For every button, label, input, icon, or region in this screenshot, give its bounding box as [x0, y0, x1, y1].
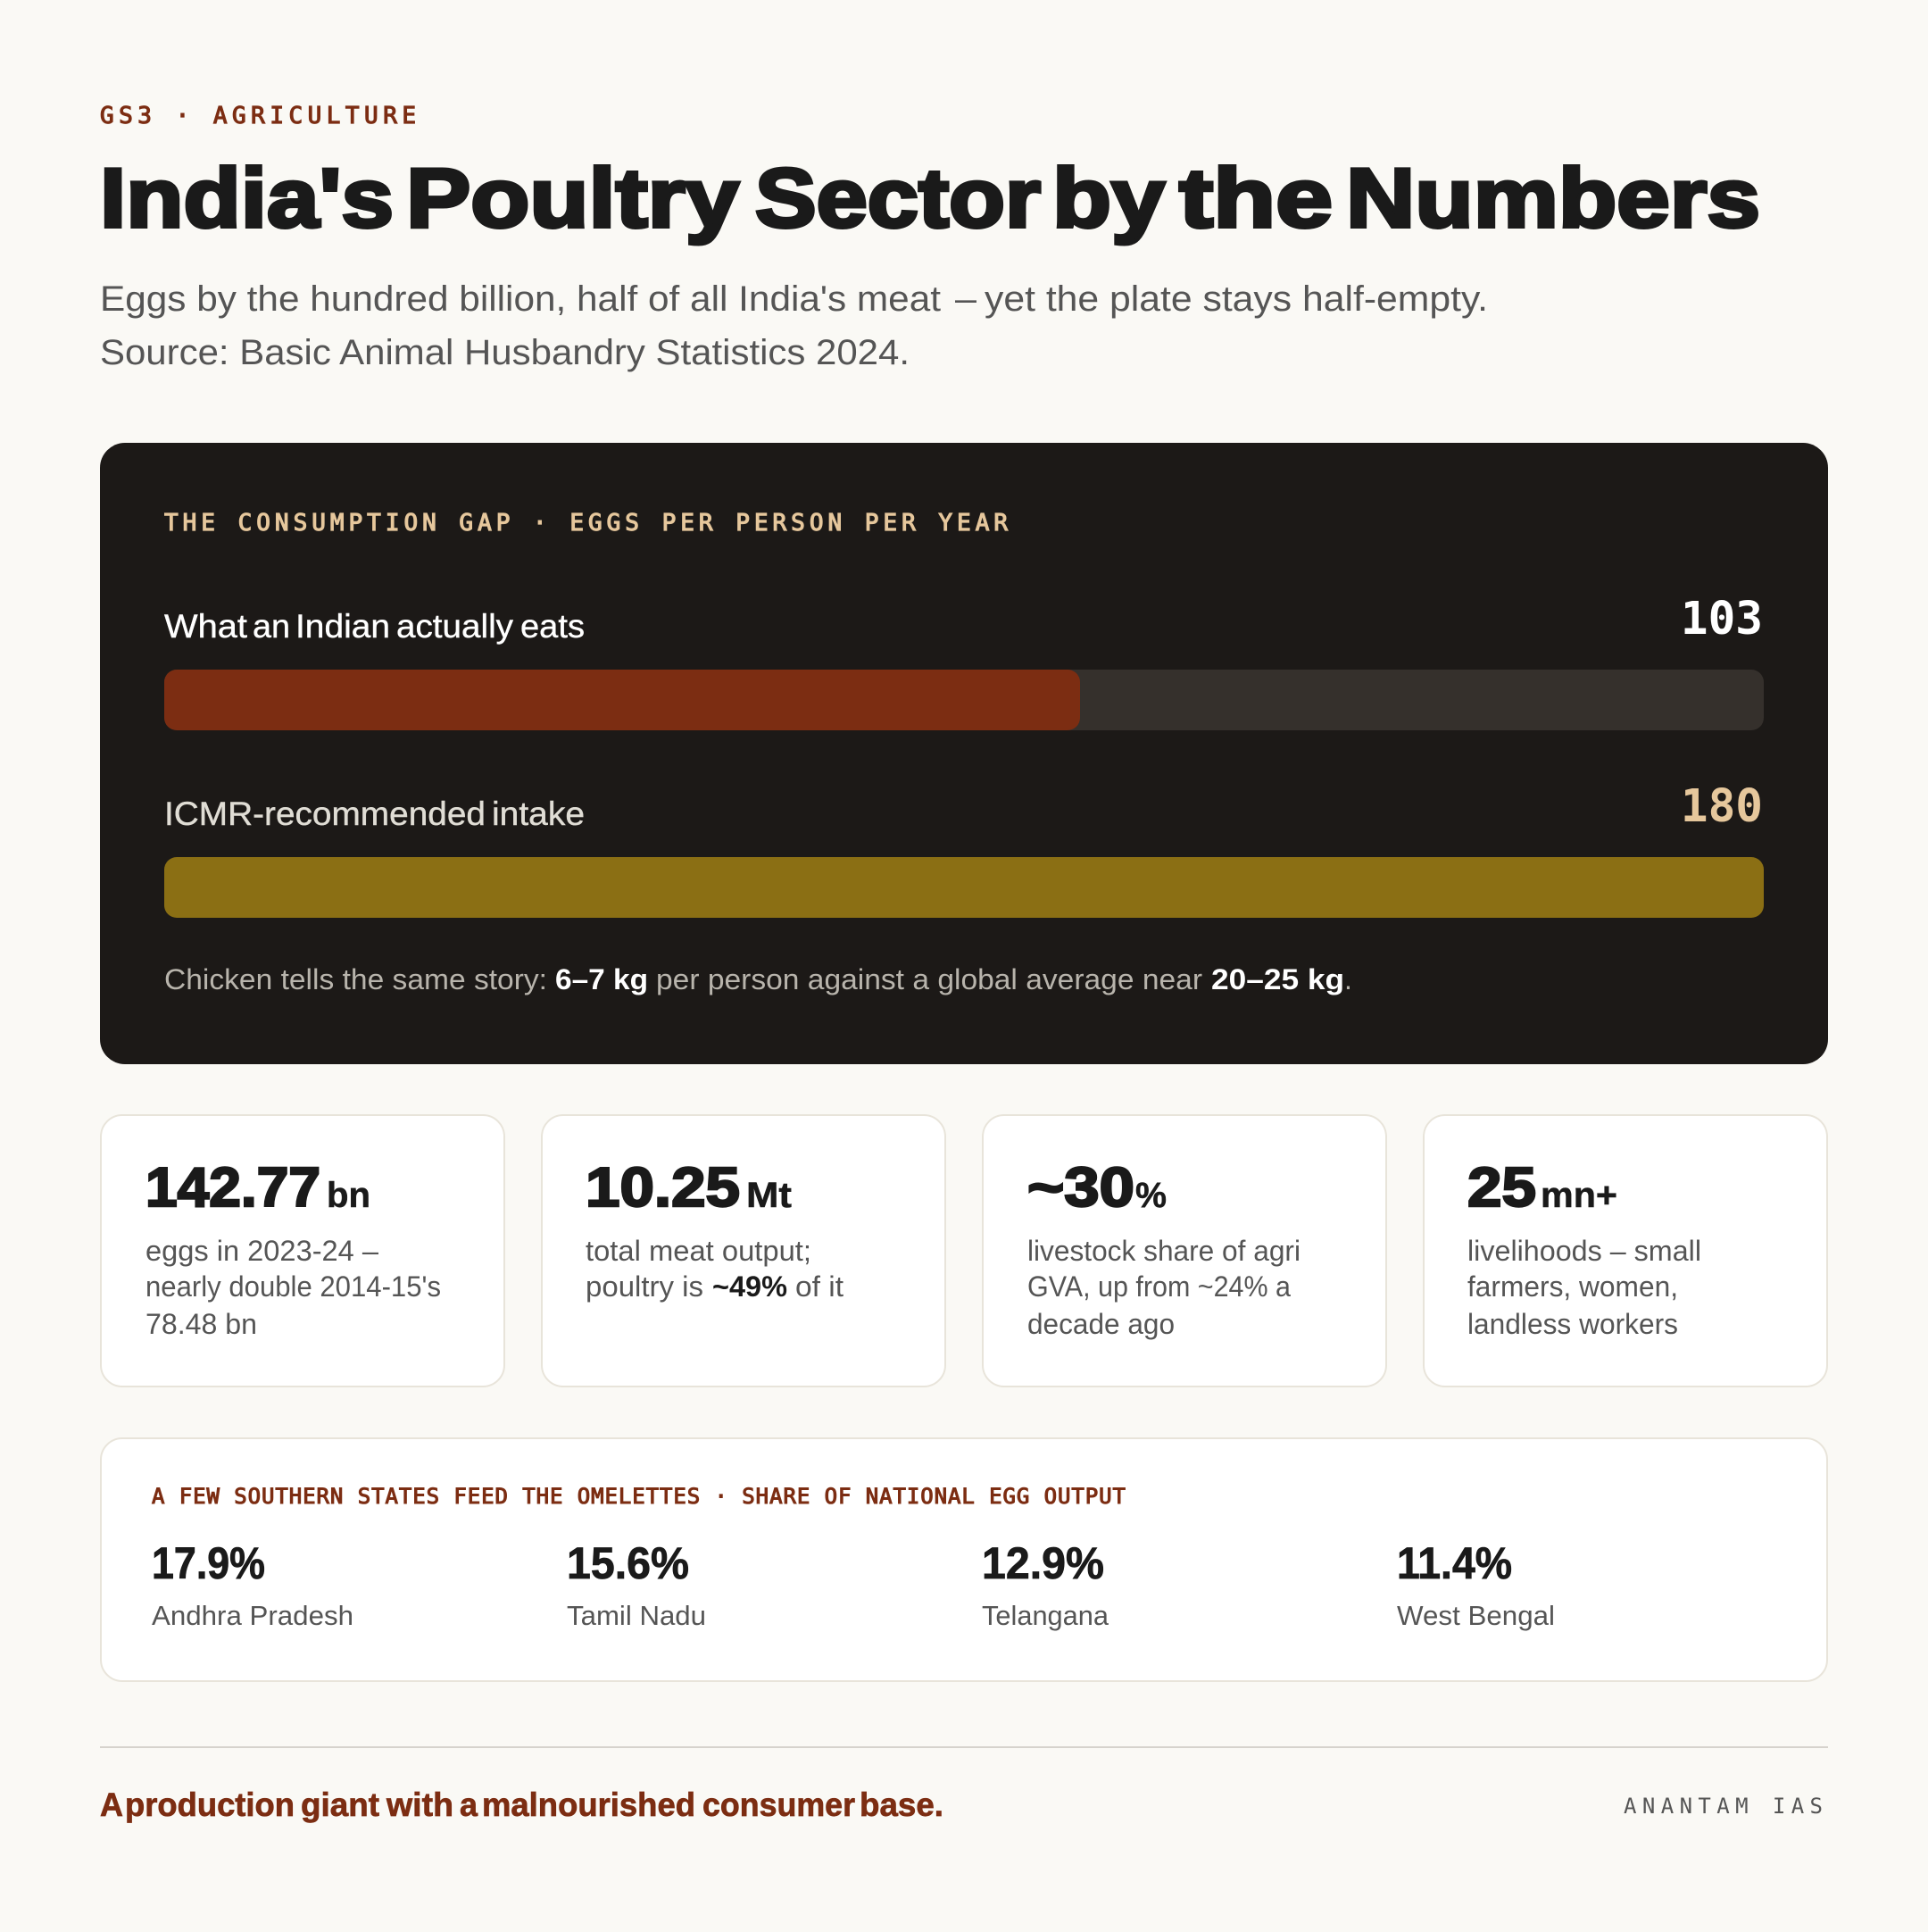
row: actual intake: What: [164, 608, 248, 645]
state: West Bengal: [1397, 1538, 1555, 1631]
row: actual intake: an: [253, 608, 290, 645]
state: Tamil Nadu: [567, 1538, 706, 1631]
stat card: meat: of it: [795, 1270, 844, 1303]
stat card: eggs: eggs in 2023-24 –: [145, 1235, 378, 1267]
stat card: livestock share: [983, 1115, 1386, 1387]
header: [100, 103, 1760, 372]
row: actual intake: eats: [520, 608, 585, 645]
panel: state shares: [101, 1438, 1827, 1681]
stat card: livestock share: GVA, up from ~24% a: [1027, 1270, 1291, 1303]
caption: Chicken tells the same story:: [164, 963, 547, 995]
title: by: [1052, 151, 1165, 245]
stat card: meat: ~49%: [712, 1270, 787, 1303]
stat card: meat: 10.25: [586, 1157, 740, 1219]
state: West Bengal: 11.4%: [1397, 1538, 1512, 1588]
title: Poultry: [406, 151, 739, 245]
state: Telangana: Telangana: [982, 1600, 1109, 1631]
takeaway: a: [460, 1786, 478, 1823]
state: Andhra Pradesh: Andhra Pradesh: [152, 1600, 353, 1631]
row: actual intake: Indian: [295, 608, 390, 645]
panel: consumption gap: [100, 443, 1828, 1064]
takeaway: [100, 1786, 943, 1823]
stat card: meat: total meat output;: [586, 1235, 811, 1267]
takeaway: base.: [860, 1786, 943, 1823]
title: Sector: [755, 151, 1041, 245]
takeaway: with: [386, 1786, 453, 1823]
row: recommended intake: intake: [492, 795, 585, 832]
takeaway: giant: [301, 1786, 379, 1823]
stat card: livelihoods: livelihoods – small: [1467, 1235, 1701, 1267]
stat card: meat: [542, 1115, 945, 1387]
state: Telangana: 12.9%: [982, 1538, 1104, 1588]
section label: A FEW SOUTHERN STATES FEED THE OMELETTES · SHARE OF NATIONAL EGG OUTPUT: [152, 1484, 1126, 1509]
footer: [100, 1786, 1823, 1823]
stat card: livelihoods: 25: [1467, 1157, 1536, 1219]
row: recommended intake: ICMR-recommended: [164, 795, 486, 832]
row: recommended intake: [164, 780, 1764, 918]
title: [100, 151, 1760, 245]
state: West Bengal: West Bengal: [1397, 1600, 1555, 1631]
section label: THE CONSUMPTION GAP · EGGS PER PERSON PER YEAR: [164, 510, 1008, 537]
row: recommended intake: 180: [1681, 780, 1763, 833]
stat card: livelihoods: landless workers: [1467, 1308, 1678, 1340]
stat card: meat: Mt: [746, 1176, 792, 1215]
caption: 20–25 kg: [1211, 963, 1344, 995]
subtitle: yet the plate stays half-empty.: [985, 279, 1488, 319]
caption: .: [1344, 963, 1352, 995]
caption: [164, 963, 1352, 995]
stat card: livelihoods: [1424, 1115, 1827, 1387]
takeaway: production: [125, 1786, 295, 1823]
stat card: livestock share: livestock share of agri: [1027, 1235, 1301, 1267]
title: the: [1179, 151, 1333, 245]
stat card: livestock share: ~30: [1027, 1157, 1134, 1219]
takeaway: malnourished: [482, 1786, 695, 1823]
title: India's: [100, 151, 394, 245]
subtitle: Eggs by the hundred billion, half of all India's meat: [100, 279, 941, 319]
row: actual intake: 103: [1681, 593, 1763, 645]
state: Andhra Pradesh: [152, 1538, 353, 1631]
takeaway: A: [100, 1786, 123, 1823]
stat card: livestock share: %: [1135, 1176, 1167, 1215]
takeaway: consumer: [702, 1786, 855, 1823]
stat card: eggs: nearly double 2014-15's: [145, 1270, 441, 1303]
state: Tamil Nadu: Tamil Nadu: [567, 1600, 706, 1631]
brand: ANANTAM IAS: [1624, 1794, 1823, 1819]
stat card: eggs: [101, 1115, 504, 1387]
caption: per person against a global average near: [656, 963, 1202, 995]
stat card: eggs: bn: [327, 1176, 370, 1215]
stat card: livestock share: decade ago: [1027, 1308, 1175, 1340]
stat card: meat: poultry is: [586, 1270, 703, 1303]
eyebrow: GS3 · AGRICULTURE: [100, 103, 416, 129]
caption: 6–7 kg: [555, 963, 648, 995]
state: Andhra Pradesh: 17.9%: [152, 1538, 265, 1588]
row: actual intake: actually: [396, 608, 514, 645]
title: Numbers: [1346, 151, 1760, 245]
subtitle: [100, 279, 1488, 372]
subtitle: –: [955, 279, 977, 319]
subtitle: Source: Basic Animal Husbandry Statistics 2024.: [100, 333, 910, 372]
stat card: eggs: 78.48 bn: [145, 1308, 257, 1340]
state: Telangana: [982, 1538, 1109, 1631]
stat card: livelihoods: mn+: [1541, 1176, 1617, 1215]
row: actual intake: [164, 593, 1764, 730]
state: Tamil Nadu: 15.6%: [567, 1538, 689, 1588]
stat card: livelihoods: farmers, women,: [1467, 1270, 1678, 1303]
stat card: eggs: 142.77: [145, 1157, 320, 1219]
